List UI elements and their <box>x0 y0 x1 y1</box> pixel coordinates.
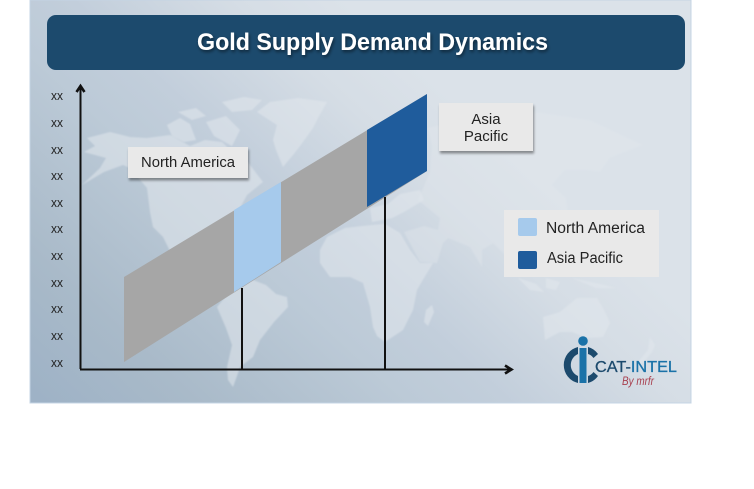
arrowhead: y axis <box>76 86 84 92</box>
callout: Asia Pacific: Pacific <box>464 128 509 145</box>
y-axis tick labels <box>51 88 63 370</box>
y-axis tick labels: xx <box>51 195 63 210</box>
callout: Asia Pacific <box>439 103 533 151</box>
map: Madagascar <box>424 305 434 326</box>
map: Africa <box>320 224 433 342</box>
band: Asia Pacific segment <box>367 94 427 207</box>
y-axis tick labels: xx <box>51 355 63 370</box>
world map <box>82 97 655 387</box>
logo icon <box>564 336 598 383</box>
legend label: North America: North America <box>546 220 645 237</box>
title banner <box>47 15 685 70</box>
background panel <box>30 0 691 403</box>
y-axis tick labels: xx <box>51 142 63 157</box>
drop line: North America <box>241 288 243 369</box>
y-axis tick labels: xx <box>51 115 63 130</box>
legend label: Asia Pacific: Asia Pacific <box>547 250 623 267</box>
y axis <box>80 88 82 369</box>
legend <box>504 210 659 277</box>
callout: North America: North America <box>141 154 236 171</box>
map: New Zealand <box>638 337 655 364</box>
y-axis tick labels: xx <box>51 221 63 236</box>
logo tagline: By mrfr <box>622 374 655 388</box>
x axis <box>80 368 511 370</box>
band chart <box>124 94 427 362</box>
y-axis tick labels: xx <box>51 248 63 263</box>
map: Australia <box>543 298 610 340</box>
map: Europe <box>370 190 424 222</box>
map: North America <box>82 132 263 290</box>
y-axis tick labels: xx <box>51 328 63 343</box>
map: Arctic islands <box>167 97 262 146</box>
legend swatch: Asia Pacific <box>518 251 537 269</box>
band: North America segment <box>234 182 281 292</box>
callout: North America <box>128 147 248 178</box>
map: Greenland <box>257 98 327 167</box>
map: Indonesia <box>518 278 616 292</box>
y-axis tick labels: xx <box>51 88 63 103</box>
legend swatch: North America <box>518 218 537 236</box>
callout: Asia Pacific: Asia <box>471 111 501 128</box>
map: South America <box>217 280 288 387</box>
band: grey base <box>124 94 427 362</box>
title: Gold Supply Demand Dynamics <box>197 29 548 56</box>
y-axis tick labels: xx <box>51 301 63 316</box>
arrowhead: x axis <box>505 366 512 374</box>
logo: CAT-INTEL by mrfr <box>564 336 677 388</box>
drop line: Asia Pacific <box>384 197 386 369</box>
chart axes and drop lines <box>76 86 512 374</box>
y-axis tick labels: xx <box>51 275 63 290</box>
y-axis tick labels: xx <box>51 168 63 183</box>
map: Asia <box>404 112 643 267</box>
logo wordmark: CAT-INTEL <box>595 359 677 376</box>
